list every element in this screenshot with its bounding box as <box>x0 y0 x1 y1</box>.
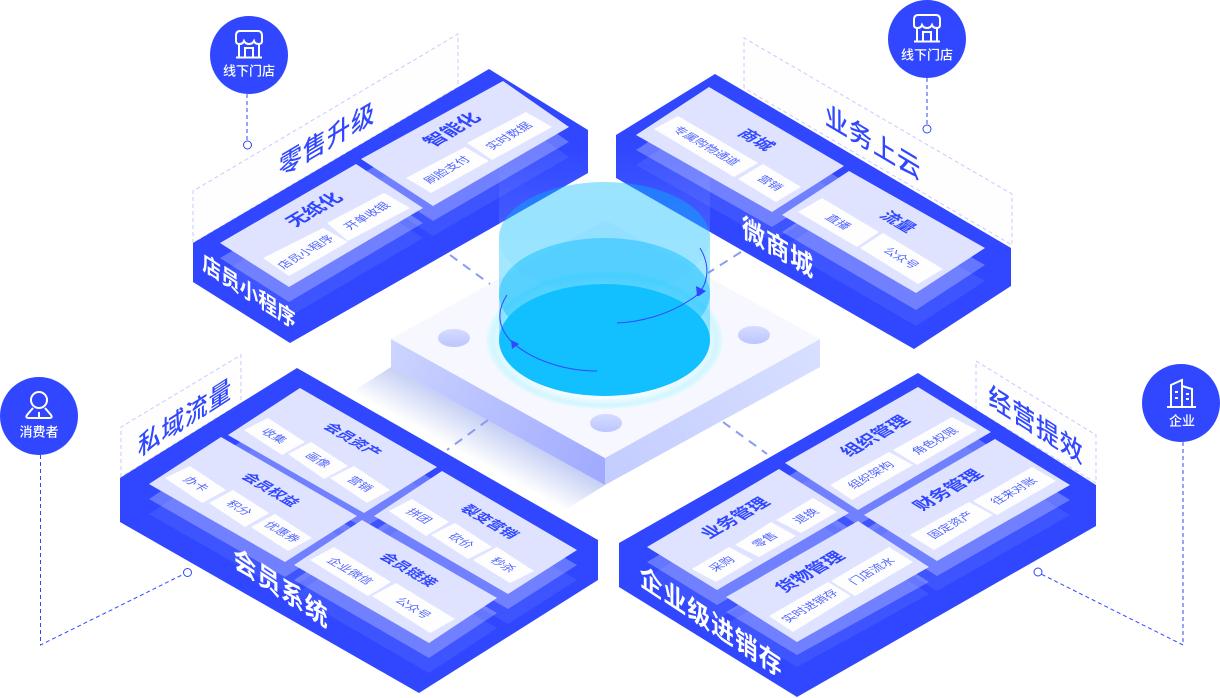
card group: 裂变营销 <box>374 471 577 594</box>
icon badge: 企业 <box>1142 364 1220 442</box>
card group: 流量 <box>782 171 985 293</box>
callout line: consumer <box>40 455 192 645</box>
card group: 业务管理: 零售 <box>748 530 781 550</box>
card group: 会员资产: 收集 <box>258 426 290 446</box>
card group: 商城 <box>636 87 844 212</box>
card group: 无纸化: 无纸化 <box>280 189 349 230</box>
panel: 企业级进销存 block <box>619 373 1096 697</box>
card group: 业务管理 <box>647 469 849 590</box>
card group: 货物管理: 实时进销存 <box>777 587 842 625</box>
card group: 会员权益 <box>149 437 357 562</box>
card group: 会员资产: 会员资产 <box>319 420 386 459</box>
card group: 业务管理: 退换 <box>790 506 822 526</box>
platform shadow <box>352 367 605 512</box>
card group: 财务管理: 固定资产 <box>924 509 978 541</box>
icon badge: 线下门店 right: 线下门店 <box>901 48 953 62</box>
layers: 流量 <box>782 188 985 326</box>
panel: 会员系统 block <box>120 368 598 693</box>
side label: 微商城: 微商城 <box>742 211 814 284</box>
card group: 裂变营销: 裂变营销 <box>456 502 523 541</box>
connector: ERP block to centre <box>723 422 767 454</box>
card group: 裂变营销: 砍价 <box>445 531 477 551</box>
card group: 组织管理: 角色权限 <box>908 425 962 457</box>
card group: 会员链接: 企业微信 <box>323 555 377 587</box>
card group: 货物管理: 货物管理 <box>770 548 850 595</box>
icon badge: 线下门店 right <box>888 0 966 78</box>
arrow: upper rotation <box>617 248 707 323</box>
callout line: store left <box>244 94 252 149</box>
card group: 商城: 专属购物通道 <box>669 125 743 168</box>
layers: 会员链接 <box>294 535 497 673</box>
connector: retail block to centre <box>450 255 490 284</box>
side label: 店员小程序: 店员小程序 <box>202 249 296 335</box>
icon badge: 线下门店 left: 线下门店 <box>223 64 275 78</box>
card group: 会员链接 <box>294 520 497 643</box>
card group: 业务管理: 采购 <box>705 554 738 574</box>
layers: 裂变营销 <box>374 486 577 624</box>
card group: 商城: 营销 <box>754 173 786 193</box>
layers: 业务管理 <box>647 484 849 620</box>
card group: 组织管理 <box>785 387 991 510</box>
side label: 企业级进销存: 企业级进销存 <box>640 560 782 684</box>
layers: 智能化 <box>361 96 569 236</box>
card group: 裂变营销: 拼团 <box>403 506 435 526</box>
icon badge: 线下门店 left <box>210 16 288 94</box>
dashed plane: 私域流量 <box>121 355 241 477</box>
title: 经营提效: 经营提效 <box>988 379 1084 471</box>
card group: 无纸化: 开单收银 <box>340 200 394 232</box>
card group: 会员链接: 公众号 <box>391 595 435 621</box>
card group: 财务管理: 财务管理 <box>908 466 988 513</box>
layers: 商城 <box>636 102 844 242</box>
card group: 组织管理: 组织管理 <box>835 412 915 459</box>
card group: 会员权益: 会员权益 <box>237 470 304 509</box>
card group: 智能化: 刷脸支付 <box>420 154 474 186</box>
card group: 货物管理: 门店流水 <box>845 555 899 587</box>
arrow: lower rotation <box>500 295 597 371</box>
card group: 会员资产: 画像 <box>302 450 334 470</box>
card group: 业务管理: 业务管理 <box>695 494 775 541</box>
panel: 店员小程序 block <box>193 69 588 343</box>
callout line: enterprise <box>1034 442 1183 645</box>
icon badge: 消费者: 消费者 <box>19 424 59 440</box>
title: 业务上云: 业务上云 <box>825 99 921 187</box>
icon badge: 消费者 <box>0 377 78 455</box>
layers: 会员权益 <box>149 452 357 592</box>
card group: 流量: 公众号 <box>879 245 923 271</box>
callout line: store right <box>923 78 931 133</box>
side label: 会员系统: 会员系统 <box>233 541 329 635</box>
card group: 智能化: 智能化 <box>419 110 487 150</box>
card group: 组织管理: 组织架构 <box>844 459 898 491</box>
card group: 无纸化 <box>220 164 423 287</box>
dashed plane: 经营提效 <box>976 361 1096 483</box>
card group: 智能化 <box>361 81 569 206</box>
layers: 货物管理 <box>726 536 929 667</box>
layers: 组织管理 <box>785 402 991 540</box>
dashed plane: 零售升级 <box>193 34 458 243</box>
card group: 会员权益: 优惠券 <box>260 519 304 545</box>
card group: 流量: 直播 <box>822 212 854 232</box>
card group: 商城: 商城 <box>733 126 780 153</box>
title: 零售升级: 零售升级 <box>279 96 375 184</box>
title: 私域流量: 私域流量 <box>138 373 232 463</box>
card group: 会员资产: 营销 <box>344 474 376 494</box>
card group: 会员权益: 积分 <box>223 498 255 518</box>
card group: 财务管理 <box>864 439 1070 561</box>
card group: 会员链接: 会员链接 <box>375 550 442 589</box>
card group: 会员权益: 办卡 <box>180 474 212 494</box>
card group: 会员资产 <box>228 388 437 513</box>
card group: 无纸化: 店员小程序 <box>273 233 338 271</box>
card group: 财务管理: 往来对账 <box>987 475 1041 507</box>
card group: 智能化: 实时数据 <box>482 120 536 152</box>
central platform <box>391 220 820 485</box>
layers: 会员资产 <box>228 403 437 543</box>
connector: mall block to centre <box>708 252 741 273</box>
panel: 微商城 block <box>616 74 1011 349</box>
connector: member block to centre <box>447 420 488 450</box>
layers: 财务管理 <box>864 454 1070 591</box>
card group: 货物管理 <box>726 521 929 642</box>
layers: 无纸化 <box>220 179 423 317</box>
card group: 流量: 流量 <box>875 209 921 235</box>
icon badge: 企业: 企业 <box>1169 414 1195 428</box>
dashed plane: 业务上云 <box>744 38 1012 245</box>
card group: 裂变营销: 秒杀 <box>487 555 519 575</box>
cylinder: translucent data store <box>486 150 722 409</box>
